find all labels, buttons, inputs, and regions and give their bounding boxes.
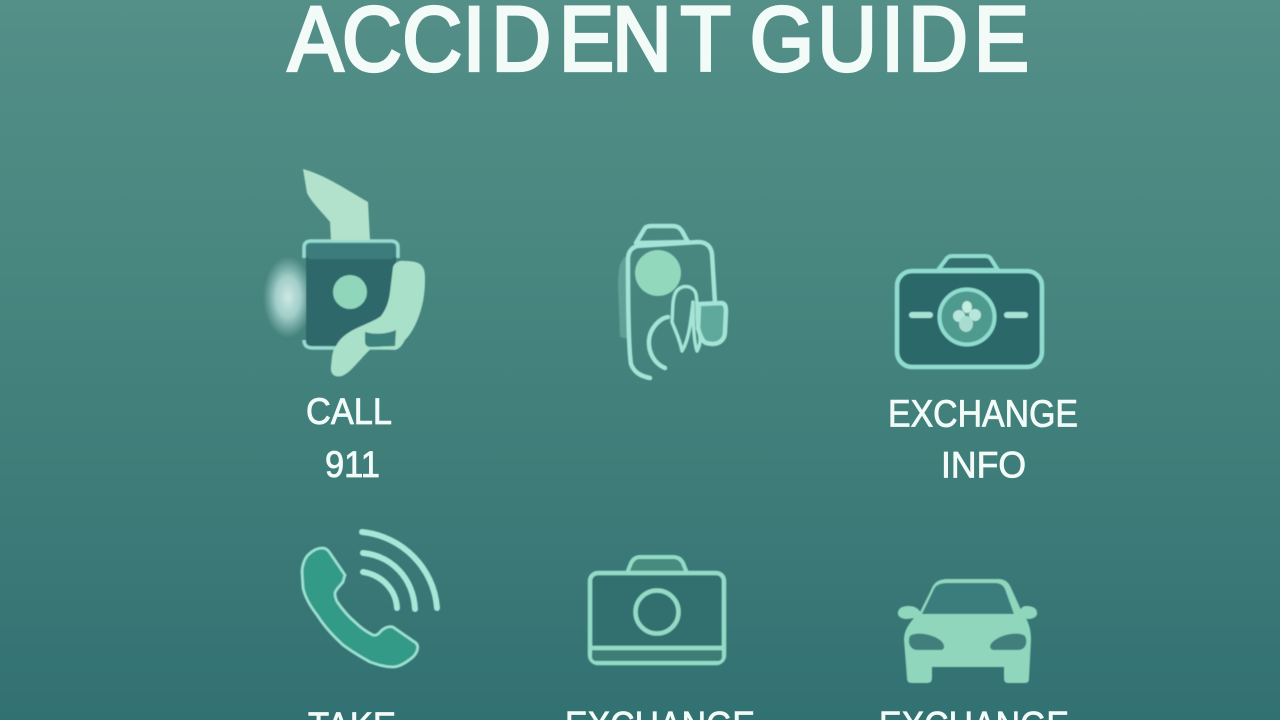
icon: telephone handset with signal waves (302, 532, 437, 667)
icon: camera outline (590, 557, 724, 663)
icon: phone with person and shield (618, 226, 726, 378)
label: exchange info: INFO (941, 444, 1026, 486)
icon: car front view (898, 579, 1037, 683)
label: call 911: 911 (325, 444, 380, 485)
label: exchange info (888, 394, 1078, 486)
label: call 911: CALL (306, 391, 392, 432)
label: call 911 (306, 391, 392, 485)
label: exchange info: EXCHANGE (888, 394, 1078, 436)
icon: camera with flower lens (897, 256, 1042, 367)
icon: hand holding phone, call 911 (263, 169, 425, 377)
